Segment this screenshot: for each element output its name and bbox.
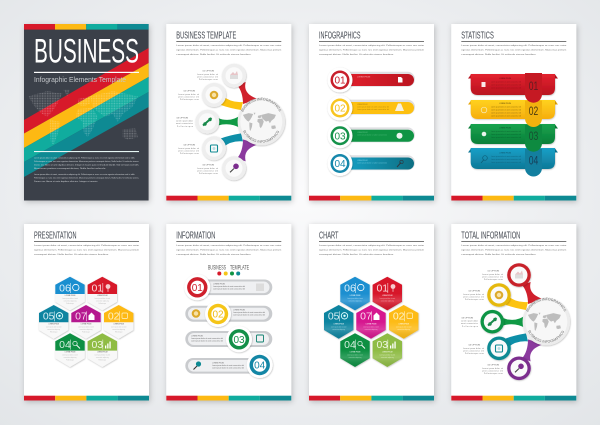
hexagon 01: consectetur adipiscing (381, 300, 394, 302)
intro text: Lorem ipsum dolor sit amet, consectetur adipiscing elit. Pellentesque ac nunc nec enim (34, 244, 140, 247)
panel: business template (164, 22, 295, 205)
option labels: amet consectetur elit (482, 276, 504, 278)
hexagon 03: LOREM IPSUM (382, 352, 393, 354)
ribbon 03 (468, 124, 558, 152)
row 03 (185, 326, 272, 352)
option 02 node (202, 83, 226, 107)
bottom colour strip (451, 396, 576, 400)
ribbon 02: Lorem ipsum dolor sit amet consectetur elit (491, 114, 522, 118)
hexagon 06 (340, 277, 370, 310)
intro text: consequat dictum. Nulla facilisi. Ut vehicula viverra faucibus. (34, 253, 110, 256)
ribbon 02: 02 (529, 104, 538, 118)
hexagon 04: LOREM IPSUM (65, 352, 76, 354)
hexagon 04: Lorem ipsum dolor sit amet (62, 354, 78, 357)
hexagon 01: Pellentesque (99, 302, 106, 305)
ribbon 01: Lorem ipsum dolor sit amet consectetur elit (491, 86, 522, 90)
hexagon 04: 04 (59, 339, 71, 351)
option 03 node (480, 310, 504, 334)
hexagon 01 (88, 277, 117, 310)
option labels: 03 OPTION (462, 318, 473, 320)
option labels: Pellentesque nunc (199, 172, 218, 175)
bottom colour strip (166, 396, 291, 400)
bar 03: Lorem ipsum dolor sit amet consectetur (357, 134, 388, 136)
heading: INFORMATION (176, 230, 215, 241)
row 01: Lorem ipsum dolor sit amet consectetur elit (213, 285, 246, 288)
ribbon 03: Lorem ipsum dolor sit amet consectetur elit (491, 130, 522, 133)
ribbon 04 (468, 148, 558, 176)
cover body text: Lorem ipsum dolor sit amet, consectetur adipiscing elit. Pellentesque ac nunc nec enim egestas elementum sed ut nibh. (34, 156, 136, 160)
ribbon 03: 03 (529, 129, 538, 143)
hexagon 01: consectetur adipiscing (96, 300, 109, 302)
intro text (176, 44, 282, 56)
central globe circle (522, 298, 572, 347)
ribbon 02: LOREM IPSUM (499, 103, 511, 105)
row 02: Lorem ipsum dolor sit amet consectetur elit (233, 311, 266, 314)
hexagon 07 (71, 305, 101, 339)
hexagon 04: LOREM IPSUM (350, 352, 361, 354)
hexagon 06: consectetur adipiscing (64, 300, 77, 302)
hexagon 01: LOREM IPSUM (382, 295, 393, 297)
ribbon 04: Lorem ipsum dolor sit amet consectetur elit (491, 158, 522, 161)
panel: total information (450, 222, 580, 404)
bar 02 (328, 96, 415, 120)
heading: CHART (319, 230, 338, 242)
ribbon 02: Lorem ipsum dolor sit amet consectetur elit (491, 108, 522, 112)
intro text: Lorem ipsum dolor sit amet, consectetur adipiscing elit. Pellentesque ac nunc nec enim (319, 244, 425, 247)
hexagon 06: consectetur adipiscing (349, 300, 362, 302)
hexagon 06: 06 (344, 282, 356, 294)
option labels: Pellentesque nunc (484, 278, 503, 281)
hexagon 02: Lorem ipsum dolor sit amet (396, 325, 412, 328)
option labels: Pellentesque nunc (180, 152, 199, 155)
cover body text: Pellentesque ac nunc nec enim egestas elementum. Maecenas pretium consequat dictum, Nulla facilisi. Ut vehicula viverra. (34, 176, 140, 180)
hexagon 05: Lorem ipsum dolor sit amet (331, 325, 347, 328)
intro text: Lorem ipsum dolor sit amet, consectetur adipiscing elit. Pellentesque ac nunc nec enim (461, 44, 567, 47)
hexagon 05: Pellentesque (50, 330, 58, 333)
hexagon 05: consectetur adipiscing (47, 328, 60, 331)
hexagon 03: consectetur adipiscing (381, 356, 394, 359)
option labels: Lorem ipsum dolor sit (463, 347, 485, 350)
hexagon 03 (88, 333, 117, 367)
hexagon 01: Lorem ipsum dolor sit amet (379, 297, 396, 300)
hexagon 04 (340, 333, 370, 367)
panel: statistics (451, 24, 576, 200)
hexagon 05: 05 (328, 311, 340, 323)
intro text: consequat dictum. Nulla facilisi. Ut vehicula viverra faucibus. (461, 53, 537, 56)
intro text: consequat dictum. Nulla facilisi. Ut vehicula viverra faucibus. (176, 253, 252, 256)
row 01: Lorem ipsum dolor sit amet consectetur elit (213, 288, 246, 290)
hexagon 06: 06 (59, 282, 71, 294)
option labels: Pellentesque nunc (484, 372, 503, 375)
heading: TOTAL INFORMATION (461, 230, 520, 241)
option labels: amet consectetur elit (463, 350, 485, 352)
option labels: amet consectetur elit (178, 150, 200, 152)
hexagon 05: consectetur adipiscing (332, 328, 345, 331)
dotted world map (28, 90, 138, 145)
intro text: consequat dictum. Nulla facilisi. Ut vehicula viverra faucibus. (176, 53, 252, 56)
cover top colour strip (24, 24, 149, 30)
hexagon 01: 01 (91, 282, 103, 294)
panel: information (166, 224, 291, 400)
ribbon 04: 04 (529, 154, 538, 168)
hexagon 02: consectetur adipiscing (112, 328, 125, 331)
intro text: egestas elementum. Pellentesque ac nunc nec enim egestas elementum. Maecenas pretium (176, 248, 282, 252)
option 03 node (195, 110, 219, 134)
hexagon 03: Pellentesque (99, 359, 106, 362)
panel: presentation (24, 224, 149, 400)
hexagon 04: Lorem ipsum dolor sit amet (347, 354, 363, 357)
option labels: Lorem ipsum dolor (461, 320, 478, 322)
hexagon 07: 07 (360, 311, 372, 323)
intro text: egestas elementum. Pellentesque ac nunc nec enim egestas elementum. Maecenas pretium (319, 48, 425, 52)
row 04: LOREM IPSUM (212, 362, 224, 364)
ribbon 03: Lorem ipsum dolor sit amet consectetur elit (491, 136, 522, 139)
diagonal stripes (24, 48, 149, 177)
subheading with dots (208, 264, 249, 276)
bar 04: Lorem ipsum dolor sit amet consectetur (357, 162, 388, 164)
cover body text: Lorem ipsum dolor sit amet, consectetur adipiscing elit. Pellentesque ac nunc nec enim egestas elementum sed ut nibh. (34, 173, 136, 176)
hexagon 03: 03 (376, 339, 388, 351)
heading: PRESENTATION (34, 230, 76, 242)
connectors (218, 82, 258, 161)
heading: BUSINESS TEMPLATE (176, 30, 236, 41)
option labels (461, 270, 504, 375)
bottom colour strip (166, 196, 291, 200)
row 03: LOREM IPSUM (191, 336, 203, 338)
subheading with dots: TEMPLATE (230, 264, 249, 272)
ribbon 01: Lorem ipsum dolor sit amet consectetur elit (491, 84, 522, 86)
central globe circle: BUSINESS INFOGRAPHICS (241, 98, 282, 112)
hexagon 06: LOREM IPSUM (65, 295, 76, 297)
bar 01: LOREM IPSUM (357, 76, 371, 78)
hexagon 05: 05 (43, 311, 55, 323)
bar 03: 03 (334, 131, 346, 142)
ribbon 01: 01 (529, 79, 538, 93)
intro text: Lorem ipsum dolor sit amet, consectetur adipiscing elit. Pellentesque ac nunc nec enim (176, 244, 282, 247)
row 04: Lorem ipsum dolor sit amet consectetur elit (212, 366, 245, 370)
hexagon 07: Lorem ipsum dolor sit amet (363, 325, 379, 328)
option labels: amet consectetur elit (178, 96, 200, 98)
hexagon 01: Lorem ipsum dolor sit amet (94, 297, 111, 300)
option labels: Lorem ipsum dolor sit (463, 293, 485, 296)
option labels: Pellentesque nunc (465, 352, 484, 355)
intro text (461, 44, 567, 56)
ribbon 04: Lorem ipsum dolor sit amet consectetur elit (491, 161, 522, 164)
hexagon 02 (104, 305, 133, 339)
hexagon 05 (324, 305, 353, 339)
intro text: egestas elementum. Pellentesque ac nunc nec enim egestas elementum. Maecenas pretium (461, 248, 567, 252)
intro text: egestas elementum. Pellentesque ac nunc nec enim egestas elementum. Maecenas pretium (176, 48, 282, 52)
intro text: egestas elementum. Pellentesque ac nunc nec enim egestas elementum. Maecenas pretium (461, 48, 567, 52)
option labels: Lorem ipsum dolor sit (482, 273, 504, 276)
hexagon 07 (356, 305, 386, 339)
panel: cover page (24, 24, 149, 200)
hexagon 02: consectetur adipiscing (397, 328, 410, 331)
row 03: 03 (233, 335, 245, 346)
intro text (461, 244, 567, 256)
option labels: Lorem ipsum dolor sit (482, 367, 504, 370)
hexagon 07: LOREM IPSUM (81, 323, 92, 325)
bar 02: LOREM IPSUM (357, 104, 368, 106)
row 04 (185, 352, 273, 378)
hexagon 06: Lorem ipsum dolor sit amet (347, 297, 363, 300)
bar 01: 01 (334, 76, 346, 87)
ribbon 03: LOREM IPSUM (499, 128, 511, 130)
hexagon 06: Lorem ipsum dolor sit amet (62, 297, 78, 300)
heading: INFOGRAPHICS (319, 30, 361, 42)
hexagon 03: consectetur adipiscing (96, 356, 109, 359)
option labels: amet consectetur elit (197, 170, 219, 172)
hexagon 04: Pellentesque (66, 359, 74, 362)
bar 04: 04 (334, 159, 346, 170)
row 02: 02 (212, 310, 224, 321)
intro text: consequat dictum. Nulla facilisi. Ut vehicula viverra faucibus. (461, 253, 537, 256)
bar 02: Lorem ipsum dolor sit amet consectetur elit (357, 108, 390, 111)
ribbon 02: Lorem ipsum dolor sit amet consectetur elit (491, 106, 522, 108)
option labels: 05 OPTION (488, 364, 499, 366)
intro text: egestas elementum. Pellentesque ac nunc nec enim egestas elementum. Maecenas pretium (34, 248, 140, 252)
option 05 node (507, 356, 531, 380)
hexagon 05: LOREM IPSUM (333, 323, 345, 325)
intro text (319, 244, 425, 256)
intro text: consequat dictum. Nulla facilisi. Ut vehicula viverra faucibus. (319, 253, 395, 256)
bar 01 (328, 68, 415, 92)
hexagon 07: consectetur adipiscing (80, 328, 93, 331)
hexagon 07: Lorem ipsum dolor sit amet (78, 325, 94, 328)
central globe circle: BUSINESS INFOGRAPHICS (243, 130, 279, 143)
central globe circle: BUSINESS INFOGRAPHICS (526, 298, 566, 312)
intro text (176, 244, 282, 256)
hexagon 07: 07 (75, 311, 87, 323)
cover body text: Pellentesque ac nunc nec enim egestas elementum. Maecenas pretium consequat dictum, Nulla facilisi. Ut vehicula viverra. (34, 160, 140, 163)
hexagon 07: LOREM IPSUM (366, 323, 377, 325)
hexagon 04: consectetur adipiscing (64, 356, 77, 359)
option 04 node (487, 336, 511, 360)
hexagon 02: LOREM IPSUM (398, 323, 410, 325)
hexagon 04: consectetur adipiscing (349, 356, 362, 359)
hexagon 03: 03 (91, 339, 103, 351)
intro text: egestas elementum. Pellentesque ac nunc nec enim egestas elementum. Maecenas pretium (319, 248, 425, 252)
option labels: 03 OPTION (177, 118, 188, 120)
option labels: amet consectetur (176, 122, 193, 125)
panel: infographics (309, 24, 434, 200)
row 02 (185, 301, 272, 327)
row 03: Lorem ipsum dolor sit amet consectetur elit (191, 337, 224, 340)
bar 03: LOREM IPSUM (357, 132, 368, 134)
option labels: 04 OPTION (469, 344, 480, 346)
hexagon 03 (373, 333, 402, 367)
bar 03 (328, 123, 415, 148)
hexagon 01 (373, 277, 402, 310)
option labels: Pellentesque nunc (199, 78, 218, 81)
hexagon 07: Pellentesque (82, 330, 90, 333)
hexagon 01: 01 (376, 282, 388, 294)
heading: STATISTICS (461, 30, 494, 41)
intro text: Lorem ipsum dolor sit amet, consectetur adipiscing elit. Pellentesque ac nunc nec enim (319, 44, 425, 47)
option labels: amet consectetur elit (463, 296, 485, 298)
bottom colour strip (451, 196, 576, 200)
row 01 (184, 274, 272, 300)
bar 02: Lorem ipsum dolor sit amet consectetur elit (357, 106, 390, 108)
ribbon 02: Lorem ipsum dolor sit amet consectetur elit (491, 112, 522, 114)
hexagon 06: LOREM IPSUM (350, 295, 361, 297)
hexagon 03: LOREM IPSUM (97, 352, 108, 354)
option labels: Pellentesque (462, 325, 478, 328)
option 01 node (507, 263, 531, 287)
cover body text: Maecenas pretium consequat dictum, Nulla facilisi vehicula. (34, 167, 107, 170)
option labels (176, 70, 219, 175)
row 03: Lorem ipsum dolor sit amet consectetur elit (191, 340, 224, 342)
ribbon 04: LOREM IPSUM (499, 152, 511, 154)
hexagon 02: Pellentesque (115, 330, 123, 333)
row 01: LOREM IPSUM (213, 284, 225, 286)
bottom colour strip (309, 196, 434, 200)
hexagon 03: Lorem ipsum dolor sit amet (94, 354, 111, 357)
hexagon 05 (39, 305, 68, 339)
hexagon 02: 02 (108, 311, 120, 323)
ribbon 02 (468, 100, 558, 127)
hexagon 04 (55, 333, 85, 367)
option 02 node (487, 283, 511, 307)
option labels: amet consectetur elit (197, 76, 219, 78)
hexagon 05: Lorem ipsum dolor sit amet (46, 325, 62, 328)
option 05 node (222, 156, 246, 180)
bar 04 (328, 151, 415, 176)
option labels: Lorem ipsum dolor sit (197, 73, 219, 76)
option 01 node (222, 64, 246, 88)
option labels: Lorem ipsum dolor sit (178, 93, 200, 96)
option labels: Pellentesque (177, 125, 193, 128)
connectors (503, 282, 543, 361)
intro text: Lorem ipsum dolor sit amet, consectetur adipiscing elit. Pellentesque ac nunc nec enim (461, 244, 567, 247)
option labels: amet consectetur elit (482, 370, 504, 372)
row 02: LOREM IPSUM (233, 310, 245, 312)
bottom colour strip (309, 396, 434, 400)
intro text: consequat dictum. Nulla facilisi. Ut vehicula viverra faucibus. (319, 53, 395, 56)
hexagon 06: Pellentesque (66, 302, 74, 305)
option labels: 05 OPTION (203, 164, 214, 166)
ribbon 01 (468, 73, 558, 103)
hexagon 02 (389, 305, 418, 339)
bottom colour strip (24, 396, 149, 400)
ribbon 03: Lorem ipsum dolor sit amet consectetur elit (491, 133, 522, 136)
cover body text (34, 156, 140, 183)
option labels: 01 OPTION (488, 270, 499, 272)
hexagon 07: consectetur adipiscing (365, 328, 378, 331)
row 04: 04 (254, 361, 266, 372)
option labels: 02 OPTION (184, 90, 195, 92)
bar 04: LOREM IPSUM (357, 160, 368, 162)
cover body text: Donec nec libero ut ante dapibus ultricies. Integer et mauris. (34, 180, 99, 183)
intro text (34, 244, 140, 256)
cover body text: Donec nec libero ut ante dapibus ultricies. Integer et mauris quis est tincidunt blandit. Sed vel turpis sed nibh. (34, 164, 140, 166)
hexagon 01: LOREM IPSUM (97, 295, 108, 297)
hexagon 02: Lorem ipsum dolor sit amet (111, 325, 127, 328)
option labels: 01 OPTION (203, 70, 214, 72)
row 02: Lorem ipsum dolor sit amet consectetur elit (233, 314, 266, 316)
bar 02: 02 (334, 104, 346, 115)
hexagon 04: 04 (344, 339, 356, 351)
option labels: Lorem ipsum dolor sit (197, 167, 219, 170)
hexagon 05: LOREM IPSUM (48, 323, 60, 325)
subheading with dots: BUSINESS (208, 264, 226, 272)
intro text: Lorem ipsum dolor sit amet, consectetur adipiscing elit. Pellentesque ac nunc nec enim (176, 44, 282, 47)
option labels: Pellentesque nunc (465, 298, 484, 301)
option 04 node (202, 136, 226, 160)
cover subtitle: Infographic Elements Template (34, 75, 126, 84)
hexagon 06 (55, 277, 85, 310)
hexagon 03: Lorem ipsum dolor sit amet (379, 354, 396, 357)
row 01: 01 (192, 283, 203, 294)
option labels: Pellentesque nunc (180, 98, 199, 101)
central globe circle: BUSINESS INFOGRAPHICS (528, 330, 564, 343)
option labels: amet consectetur (461, 322, 478, 325)
option labels: 02 OPTION (469, 290, 480, 292)
ribbon 04: Lorem ipsum dolor sit amet consectetur elit (491, 155, 522, 158)
option labels: Lorem ipsum dolor sit (178, 147, 200, 150)
ribbon 01: LOREM IPSUM (499, 78, 511, 80)
row 04: Lorem ipsum dolor sit amet consectetur elit (212, 364, 245, 367)
ribbon 01: Lorem ipsum dolor sit amet consectetur elit (491, 80, 522, 84)
hexagon 02: 02 (393, 311, 405, 323)
intro text (319, 44, 425, 56)
hexagon 02: LOREM IPSUM (113, 323, 125, 325)
central globe circle (238, 98, 286, 147)
panel: chart (309, 224, 434, 400)
option labels: Lorem ipsum dolor (176, 120, 193, 122)
cover title: BUSINESS (34, 33, 139, 71)
option labels: 04 OPTION (184, 144, 195, 146)
